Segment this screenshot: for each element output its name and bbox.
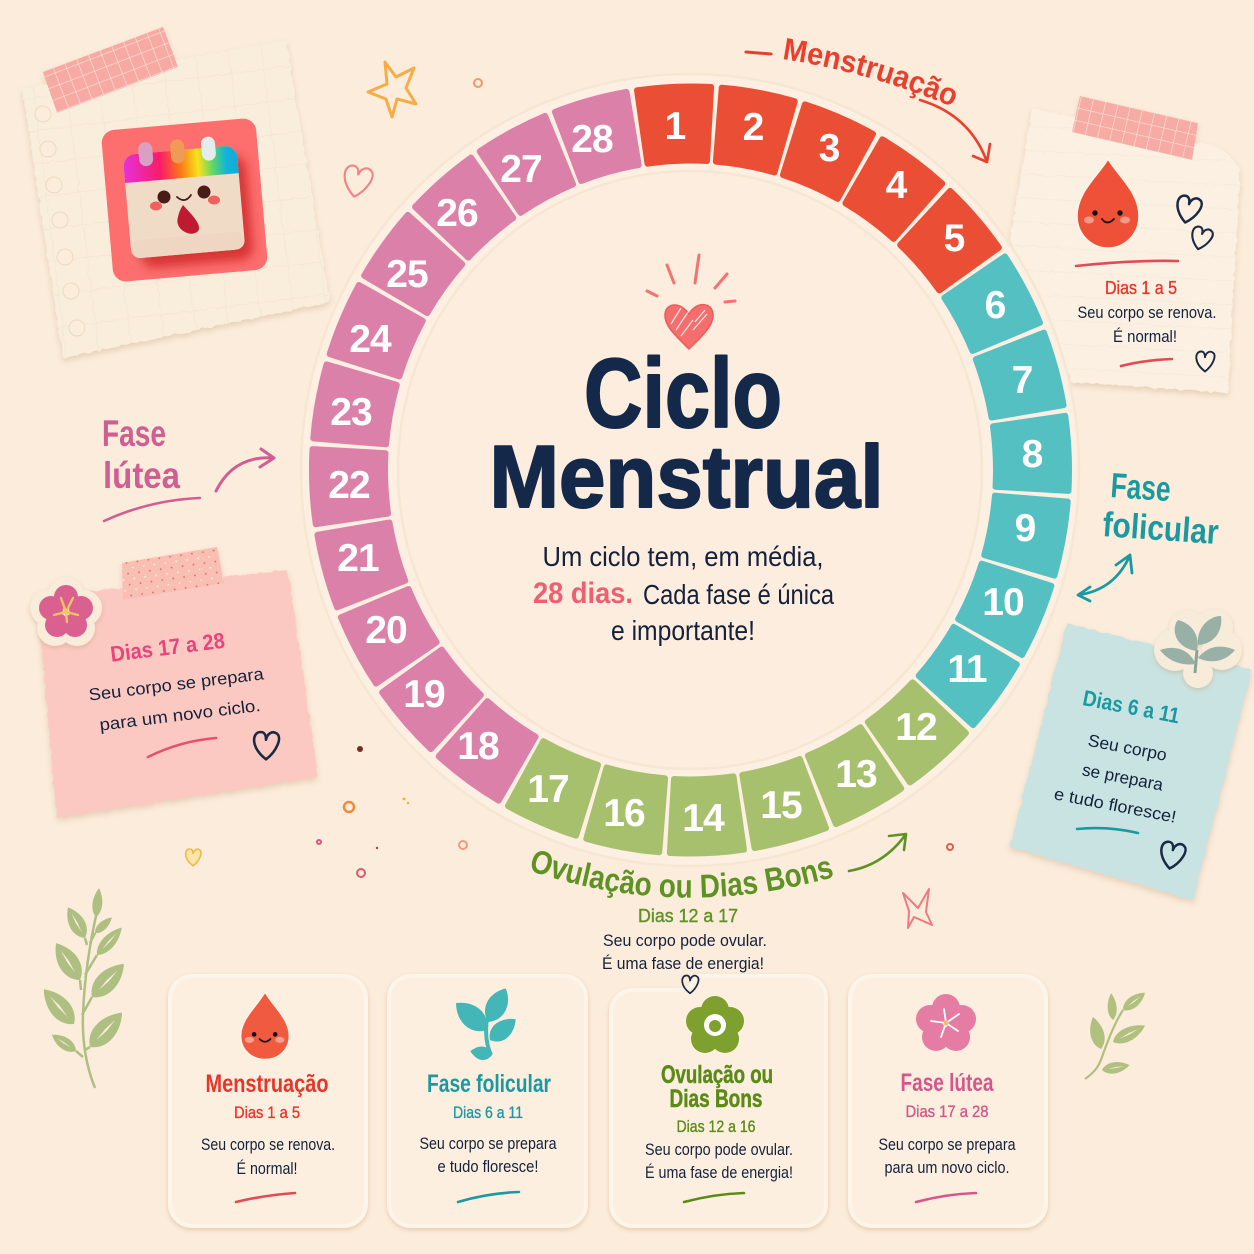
day 10: 10 bbox=[982, 581, 1024, 624]
ovulation description: Seu corpo pode ovular. bbox=[603, 931, 767, 950]
card: ovulation: Dias Bons bbox=[670, 1085, 762, 1113]
card: follicular: Fase folicular bbox=[427, 1070, 551, 1098]
day 12 bbox=[862, 678, 967, 784]
title: Menstrual bbox=[490, 427, 884, 526]
card: ovulation: Seu corpo pode ovular. bbox=[645, 1140, 793, 1159]
icon: green flower bbox=[686, 996, 744, 1053]
label: Fase lútea: lútea bbox=[103, 455, 180, 496]
day 17 bbox=[507, 738, 605, 837]
notebook punch holes bbox=[35, 106, 85, 336]
day 5: 5 bbox=[944, 217, 965, 260]
icon: plant bbox=[449, 984, 521, 1062]
day 28: 28 bbox=[571, 118, 613, 161]
day 23 bbox=[311, 364, 398, 452]
icon: heart with rays bbox=[647, 255, 735, 349]
day 20: 20 bbox=[365, 609, 407, 652]
heart bbox=[682, 976, 699, 993]
day 1: 1 bbox=[665, 105, 686, 148]
day 12: 12 bbox=[895, 706, 937, 749]
label: Fase folicular: folicular bbox=[1101, 505, 1220, 552]
icon: smiling blood drop bbox=[1077, 159, 1139, 248]
day 20 bbox=[339, 582, 440, 684]
day 13 bbox=[801, 724, 902, 826]
card: luteal bbox=[850, 976, 1046, 1226]
calendar face bbox=[150, 186, 220, 234]
day 24: 24 bbox=[349, 318, 392, 361]
subtitle: Cada fase é única bbox=[643, 579, 834, 610]
wheel background disc bbox=[301, 74, 1079, 866]
decor: pink sketch star bbox=[903, 889, 932, 928]
label: Fase folicular: Fase bbox=[1109, 466, 1172, 509]
calendar shadow bbox=[134, 155, 254, 269]
day 17: 17 bbox=[527, 768, 569, 811]
heart bbox=[254, 732, 279, 759]
day 21: 21 bbox=[337, 537, 379, 580]
card: menstruation bbox=[170, 976, 366, 1226]
note text: luteal bbox=[30, 577, 279, 759]
label: Fase lútea bbox=[102, 413, 274, 521]
label: Ovulação ou Dias Bons bbox=[532, 832, 908, 898]
day 3 bbox=[776, 103, 874, 202]
ovulation description: É uma fase de energia! bbox=[602, 954, 764, 973]
note text: follicular: Dias 6 a 11 bbox=[1081, 685, 1182, 728]
note text: luteal: para um novo ciclo. bbox=[98, 696, 262, 735]
day 22 bbox=[311, 446, 388, 524]
day 25 bbox=[363, 214, 467, 319]
day 15: 15 bbox=[760, 784, 802, 827]
washi tape bbox=[1072, 96, 1198, 160]
day 14 bbox=[667, 776, 744, 855]
day 22: 22 bbox=[328, 464, 370, 507]
card: menstruation: É normal! bbox=[236, 1159, 298, 1178]
decor: left branch bbox=[36, 888, 131, 1088]
decor: right branch bbox=[1085, 988, 1149, 1079]
card: menstruation: Dias 1 a 5 bbox=[234, 1103, 300, 1122]
dotted washi tape bbox=[122, 547, 224, 600]
card: follicular: Seu corpo se prepara bbox=[420, 1134, 557, 1153]
note text: follicular bbox=[1052, 609, 1242, 871]
day 11 bbox=[914, 621, 1018, 726]
note text: follicular: e tudo floresce! bbox=[1052, 784, 1178, 827]
day 5 bbox=[895, 190, 1000, 296]
note text: luteal: Seu corpo se prepara bbox=[88, 664, 265, 705]
label: Fase folicular bbox=[1078, 466, 1220, 601]
arrow bbox=[216, 449, 274, 491]
card: luteal: para um novo ciclo. bbox=[884, 1158, 1010, 1177]
day 19: 19 bbox=[403, 673, 445, 716]
double arrow bbox=[1078, 555, 1132, 601]
day 4: 4 bbox=[886, 164, 908, 207]
day 9: 9 bbox=[1015, 507, 1036, 550]
day 15 bbox=[735, 757, 827, 850]
note: menstruation bbox=[1010, 96, 1240, 393]
day 18: 18 bbox=[457, 725, 499, 768]
note text: menstruation: Dias 1 a 5 bbox=[1105, 277, 1177, 298]
card: menstruation: Menstruação bbox=[206, 1070, 328, 1098]
note: notebook paper with calendar bbox=[22, 27, 330, 358]
card: menstruation: Seu corpo se renova. bbox=[201, 1135, 335, 1154]
arrow bbox=[849, 834, 906, 871]
note text: menstruation bbox=[1076, 159, 1216, 371]
day 27 bbox=[479, 114, 580, 216]
flower sticker bbox=[30, 577, 102, 646]
icon: pink flower bbox=[916, 994, 976, 1051]
subtitle: 28 dias. bbox=[533, 577, 633, 610]
ovulation description bbox=[602, 905, 767, 973]
icon: smiling drop bbox=[241, 992, 289, 1059]
subtitle: e importante! bbox=[611, 615, 755, 646]
day 8 bbox=[993, 416, 1070, 494]
washi tape bbox=[43, 27, 178, 113]
day 9 bbox=[983, 488, 1070, 576]
icon: calendar with face bbox=[101, 118, 268, 282]
day 4 bbox=[839, 138, 943, 243]
subtitle: Um ciclo tem, em média, bbox=[542, 541, 824, 572]
label: Fase lútea: Fase bbox=[102, 413, 166, 454]
leaf sticker bbox=[1154, 609, 1242, 688]
card: ovulation: Dias 12 a 16 bbox=[676, 1117, 756, 1136]
title bbox=[490, 338, 884, 526]
day 1 bbox=[637, 85, 714, 164]
day 24 bbox=[328, 284, 426, 383]
note text: follicular: se prepara bbox=[1081, 760, 1165, 795]
title: Ciclo bbox=[584, 338, 782, 448]
day 19 bbox=[381, 644, 486, 750]
hearts bbox=[1174, 194, 1215, 371]
note: follicular phase bbox=[1010, 623, 1252, 900]
day 14: 14 bbox=[682, 797, 725, 840]
card: follicular bbox=[389, 976, 586, 1226]
day 13: 13 bbox=[835, 753, 877, 796]
day 16 bbox=[586, 766, 672, 854]
label: Menstruação bbox=[744, 38, 992, 164]
day 7: 7 bbox=[1012, 359, 1032, 402]
card: follicular: e tudo floresce! bbox=[438, 1157, 538, 1176]
day 21 bbox=[316, 515, 407, 608]
card: ovulation: É uma fase de energia! bbox=[645, 1163, 793, 1182]
day 27: 27 bbox=[500, 148, 542, 191]
day 16: 16 bbox=[603, 792, 645, 835]
card: luteal: Fase lútea bbox=[900, 1069, 994, 1097]
day 2: 2 bbox=[743, 106, 764, 149]
note text: menstruation: É normal! bbox=[1113, 327, 1177, 346]
decor: orange star bbox=[368, 62, 416, 117]
note text: luteal: Dias 17 a 28 bbox=[109, 628, 226, 667]
card: follicular: Dias 6 a 11 bbox=[453, 1103, 523, 1122]
calendar body bbox=[122, 134, 245, 259]
ovulation description: Dias 12 a 17 bbox=[638, 905, 738, 926]
decor: small circles and dots bbox=[317, 79, 953, 877]
day 11: 11 bbox=[947, 648, 987, 691]
card: luteal: Seu corpo se prepara bbox=[878, 1135, 1016, 1154]
note text: menstruation: Seu corpo se renova. bbox=[1078, 303, 1216, 322]
wheel: 28 day segments bbox=[311, 85, 1070, 855]
arrow bbox=[920, 100, 990, 162]
red tile bbox=[101, 118, 268, 282]
day 3: 3 bbox=[819, 127, 840, 170]
note: luteal phase bbox=[37, 547, 318, 818]
day 6: 6 bbox=[985, 284, 1006, 327]
day 7 bbox=[974, 332, 1065, 425]
card: luteal: Dias 17 a 28 bbox=[906, 1102, 988, 1121]
card: ovulation bbox=[611, 976, 826, 1226]
heart bbox=[1158, 841, 1186, 871]
day 23: 23 bbox=[330, 391, 372, 434]
day 8: 8 bbox=[1022, 433, 1043, 476]
day 26 bbox=[414, 156, 519, 262]
day 25: 25 bbox=[386, 253, 428, 296]
label: Menstruação: Menstruação bbox=[784, 38, 956, 105]
day 10 bbox=[955, 557, 1053, 656]
label: Ovulação ou Dias Bons: Ovulação ou Dias Bons bbox=[532, 851, 833, 898]
day 6 bbox=[941, 256, 1042, 358]
day 28 bbox=[554, 90, 646, 183]
card: ovulation: Ovulação ou bbox=[661, 1061, 773, 1089]
day 18 bbox=[438, 697, 542, 802]
day 2 bbox=[709, 86, 795, 174]
subtitle bbox=[533, 541, 834, 646]
decor: yellow heart bbox=[186, 849, 201, 866]
day 26: 26 bbox=[436, 192, 478, 235]
decor: pink heart bbox=[341, 164, 374, 199]
note text: follicular: Seu corpo bbox=[1086, 731, 1168, 765]
